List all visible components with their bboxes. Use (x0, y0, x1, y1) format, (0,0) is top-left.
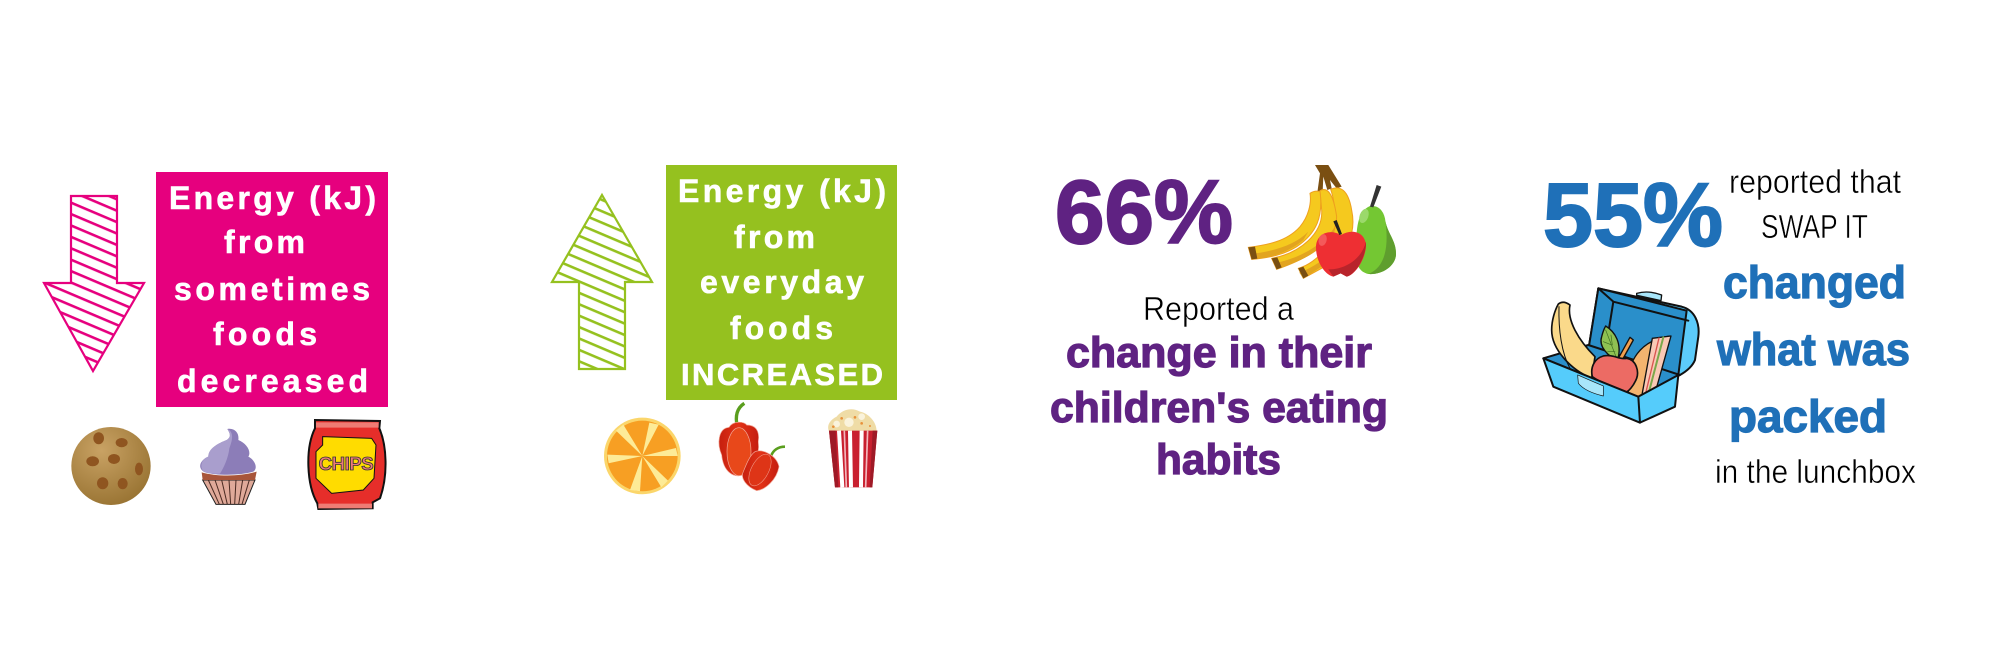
text: reported a: Reported a (1143, 290, 1295, 327)
callout: green box: everyday (700, 264, 864, 300)
icon: red peppers (719, 403, 785, 491)
text: change in their children's eating habits: habits (1156, 436, 1281, 484)
callout: green box: Energy (kJ) (678, 173, 886, 209)
callout: pink box: sometimes (174, 271, 370, 307)
callout: green box: INCREASED (681, 357, 883, 392)
icon: chips bag (308, 420, 386, 509)
panel: sometimes foods decreased (44, 172, 388, 509)
text: reported that SWAP IT (1729, 163, 1901, 245)
text: changed what was packed: what was (1716, 324, 1910, 375)
text: reported that SWAP IT: SWAP IT (1761, 208, 1868, 245)
callout: green box: foods (730, 310, 833, 346)
text: change in their children's eating habits (1050, 329, 1388, 484)
panel: everyday foods increased (552, 165, 897, 494)
icon: chips bag: CHIPS (319, 453, 374, 474)
text: in the lunchbox: in the lunchbox (1715, 453, 1916, 490)
callout: pink box: foods (213, 316, 317, 352)
text: reported that SWAP IT: reported that (1729, 163, 1901, 200)
icon: cookie (71, 427, 151, 505)
callout: green box (666, 165, 897, 400)
statistic: 55%: 55% (1543, 166, 1723, 266)
icon: cupcake (200, 429, 257, 504)
icon: up arrow (552, 195, 652, 369)
panel: 55% changed lunchbox (1543, 163, 1916, 490)
icon: bananas, apple and pear (1248, 165, 1396, 278)
statistic: 66%: 66% (1055, 163, 1233, 263)
text: change in their children's eating habits: change in their (1066, 329, 1372, 377)
icon: orange slice (604, 418, 681, 494)
text: changed what was packed: changed (1723, 257, 1906, 308)
callout: pink box: decreased (177, 363, 368, 399)
callout: pink box: from (224, 224, 305, 260)
text: changed what was packed: packed (1729, 391, 1887, 442)
callout: pink box (156, 172, 388, 407)
panel: 66% reported change (1050, 163, 1396, 484)
callout: pink box: Energy (kJ) (169, 180, 376, 216)
text: change in their children's eating habits: children's eating (1050, 384, 1388, 432)
text: changed what was packed (1716, 257, 1910, 442)
icon: lunchbox (1543, 288, 1699, 423)
icon: down arrow (44, 196, 144, 371)
callout: green box: from (734, 219, 815, 255)
icon: popcorn (828, 409, 877, 487)
